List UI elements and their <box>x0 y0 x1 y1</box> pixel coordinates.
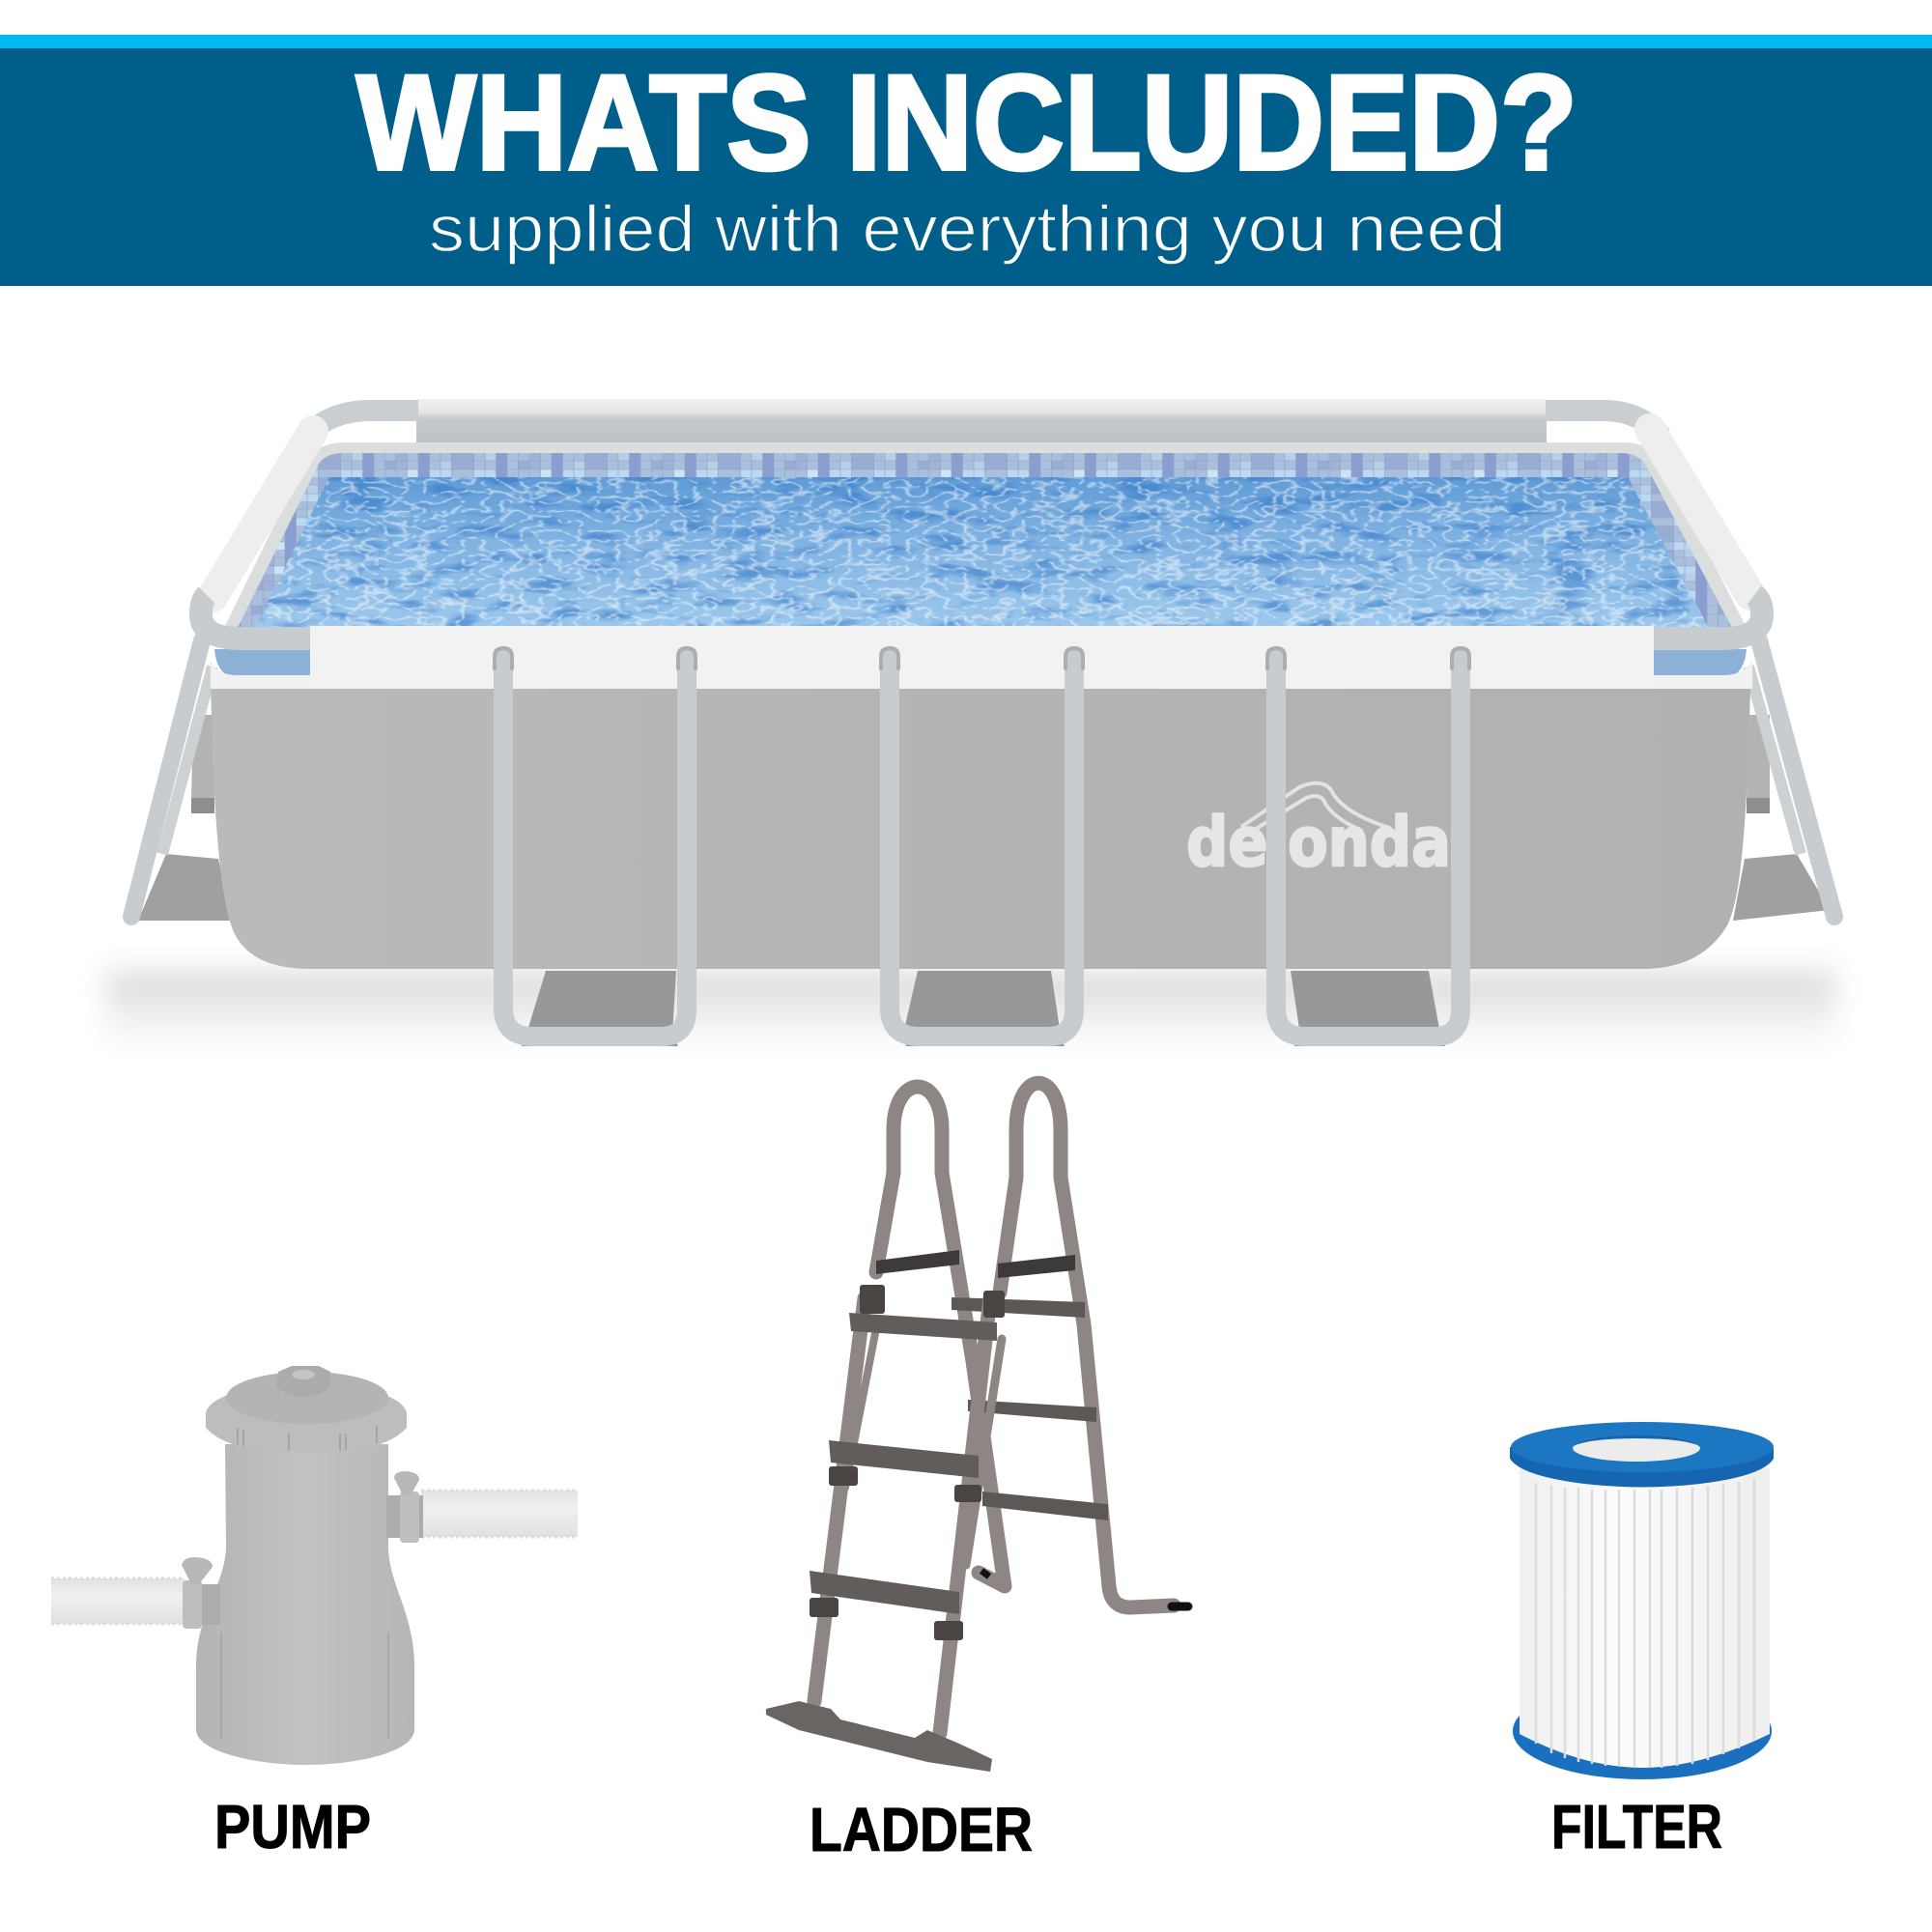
ground shadow <box>106 971 1835 1048</box>
top cap edge <box>1510 1447 1774 1488</box>
header: title banner <box>0 35 1932 286</box>
liner rim <box>224 442 1747 628</box>
top braces <box>876 1250 1075 1278</box>
pump body <box>196 1444 414 1765</box>
cap ring <box>206 1383 407 1452</box>
rail tip <box>1172 1602 1188 1611</box>
top corner tubes <box>307 411 1662 437</box>
wall base shadow <box>280 968 1671 972</box>
product: filter <box>1510 1422 1774 1779</box>
centre hole <box>1573 1435 1700 1462</box>
product: pump <box>51 1366 578 1765</box>
product: pool <box>106 399 1835 1048</box>
bottom blue ring <box>1513 1683 1772 1779</box>
left corner tube <box>201 595 310 639</box>
label: pump: PUMP <box>214 1792 371 1861</box>
cap ridges <box>238 1426 377 1451</box>
brand logo: delonda <box>1186 803 1451 882</box>
grey pool wall <box>211 688 1750 969</box>
front frame rails <box>814 1298 1002 1733</box>
corner water strips <box>214 649 1747 678</box>
base foot <box>766 1701 992 1772</box>
right white corner rail <box>1650 429 1750 595</box>
product: ladder <box>766 1083 1188 1772</box>
top cap <box>1511 1422 1774 1472</box>
front feet <box>522 971 1445 1046</box>
white front rail <box>310 626 1654 688</box>
front U-shaped legs <box>503 657 1461 1037</box>
left white corner rail <box>213 431 313 597</box>
back steps <box>952 1297 1108 1520</box>
front steps <box>810 1313 997 1614</box>
title: WHATS INCLUDED? <box>356 46 1577 198</box>
hole rim <box>1573 1435 1700 1448</box>
left coupler <box>182 1557 220 1629</box>
mosaic tile band <box>238 453 1732 628</box>
hand rails <box>876 1083 1174 1607</box>
water <box>255 477 1709 628</box>
subtitle: supplied with everything you need <box>429 192 1506 266</box>
label: filter: FILTER <box>1551 1792 1722 1861</box>
leg top caps <box>495 648 1469 668</box>
right hose <box>421 1491 578 1537</box>
left side support leg <box>131 640 233 921</box>
label: ladder: LADDER <box>810 1795 1033 1864</box>
body base recess lines <box>221 1633 388 1739</box>
left hose <box>51 1578 185 1624</box>
lower tip <box>981 1571 989 1577</box>
right coupler <box>386 1471 423 1543</box>
knob top <box>292 1370 315 1379</box>
pleats <box>1520 1468 1770 1768</box>
right side support leg <box>1733 640 1834 921</box>
right corner tube <box>1654 595 1762 639</box>
back rail <box>416 399 1547 442</box>
lid <box>226 1372 388 1424</box>
clamps <box>810 1285 1005 1640</box>
knob <box>276 1366 330 1397</box>
white lower lip <box>211 660 1752 689</box>
